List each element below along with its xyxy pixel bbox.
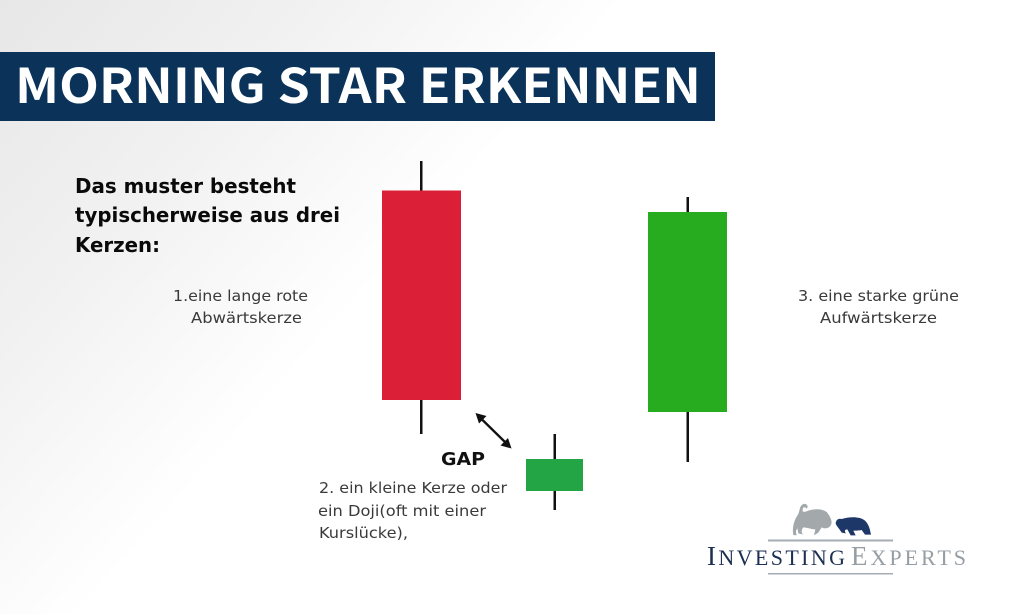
label: candle 3: [798, 287, 959, 327]
logo wordmark: experts: EXPERTS: [851, 541, 966, 571]
logo: Investing Experts: [707, 504, 966, 574]
label: candle 3: Aufwärtskerze: [820, 309, 937, 327]
title banner: MORNING STAR ERKENNEN: [15, 47, 701, 117]
label: candle 3: 3. eine starke grüne: [798, 287, 959, 305]
green candle: [648, 197, 727, 462]
icon: bear: [836, 517, 871, 535]
label: candle 1: 1.eine lange rote: [173, 287, 308, 305]
label: candle 2: [318, 479, 508, 542]
label: candle 2: 2. ein kleine Kerze oder: [319, 479, 508, 497]
logo rules: [768, 540, 893, 542]
arrow: gap: [476, 413, 512, 448]
small green candle: [526, 434, 583, 510]
icon: bull: [793, 504, 832, 535]
heading: pattern description: Das muster besteht: [75, 174, 296, 198]
label: candle 1: [173, 287, 308, 327]
logo wordmark: investing: INVESTING: [707, 541, 845, 571]
heading: pattern description: [75, 174, 340, 257]
red candle: [382, 161, 461, 434]
heading: pattern description: typischerweise aus drei: [75, 203, 340, 227]
label: candle 1: Abwärtskerze: [191, 309, 302, 327]
heading: pattern description: Kerzen:: [75, 233, 160, 257]
label: gap: GAP: [441, 449, 485, 470]
label: candle 2: Kurslücke),: [319, 524, 408, 542]
label: candle 2: ein Doji(oft mit einer: [318, 502, 487, 520]
